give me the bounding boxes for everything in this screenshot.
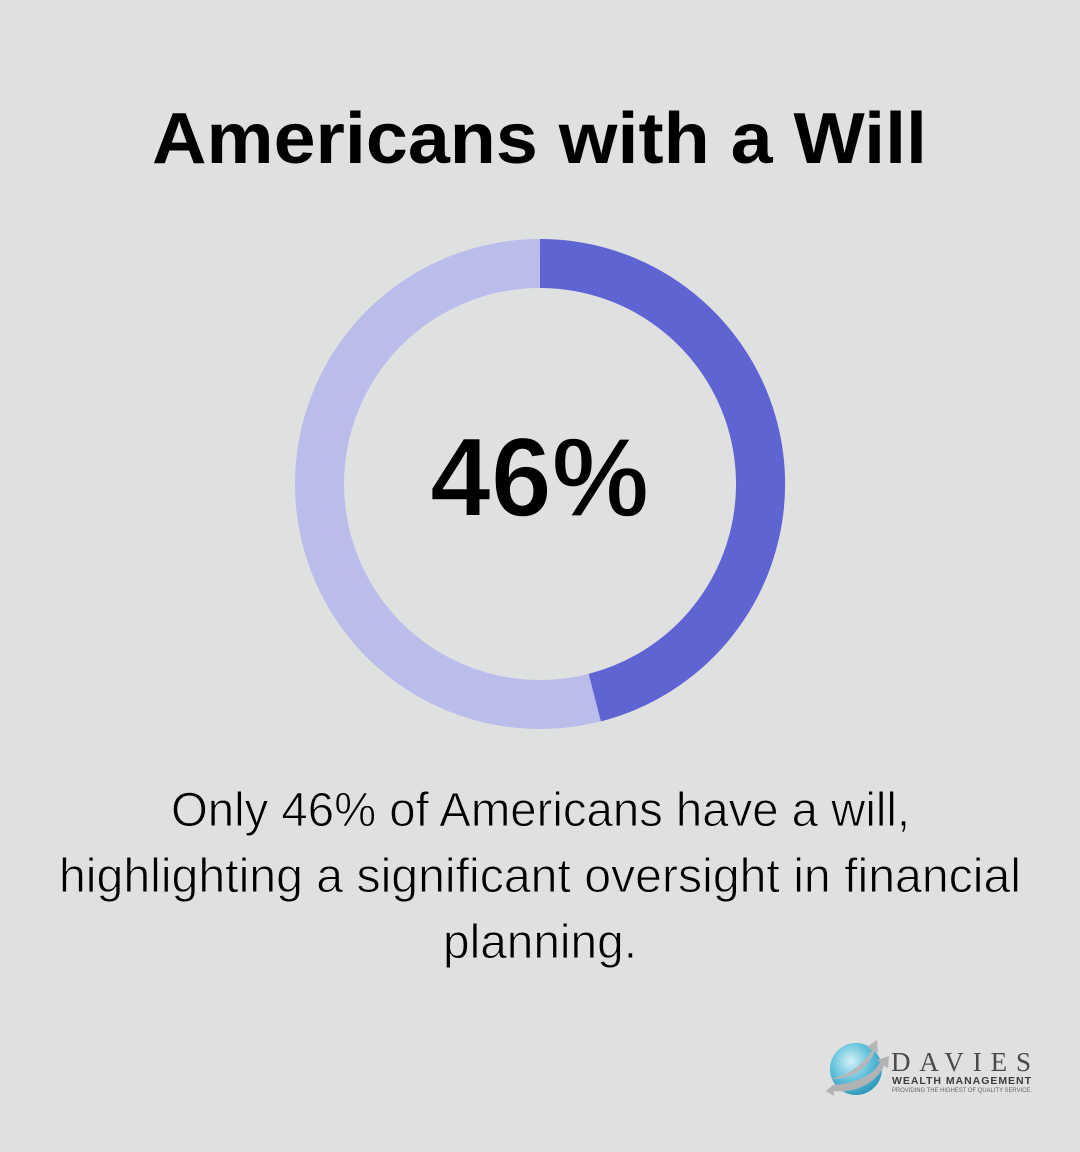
center value: 46% xyxy=(430,415,649,540)
description text: Only 46% of Americans have a will, xyxy=(171,784,910,837)
description text xyxy=(59,784,1021,969)
donut value arc xyxy=(540,264,761,698)
icon: globe with arrows xyxy=(826,1040,889,1096)
title: Americans with a Will xyxy=(152,99,927,179)
donut chart: 46% xyxy=(320,264,761,704)
tagline: PROVIDING THE HIGHEST OF QUALITY SERVICE. xyxy=(892,1087,1032,1094)
description text: highlighting a significant oversight in financial xyxy=(59,850,1021,903)
wordmark subtitle: WEALTH MANAGEMENT xyxy=(892,1075,1032,1087)
logo: Davies Wealth Management xyxy=(826,1040,1032,1096)
description text: planning. xyxy=(443,916,637,969)
wordmark: DAVIES xyxy=(891,1047,1031,1077)
donut track xyxy=(320,264,760,704)
